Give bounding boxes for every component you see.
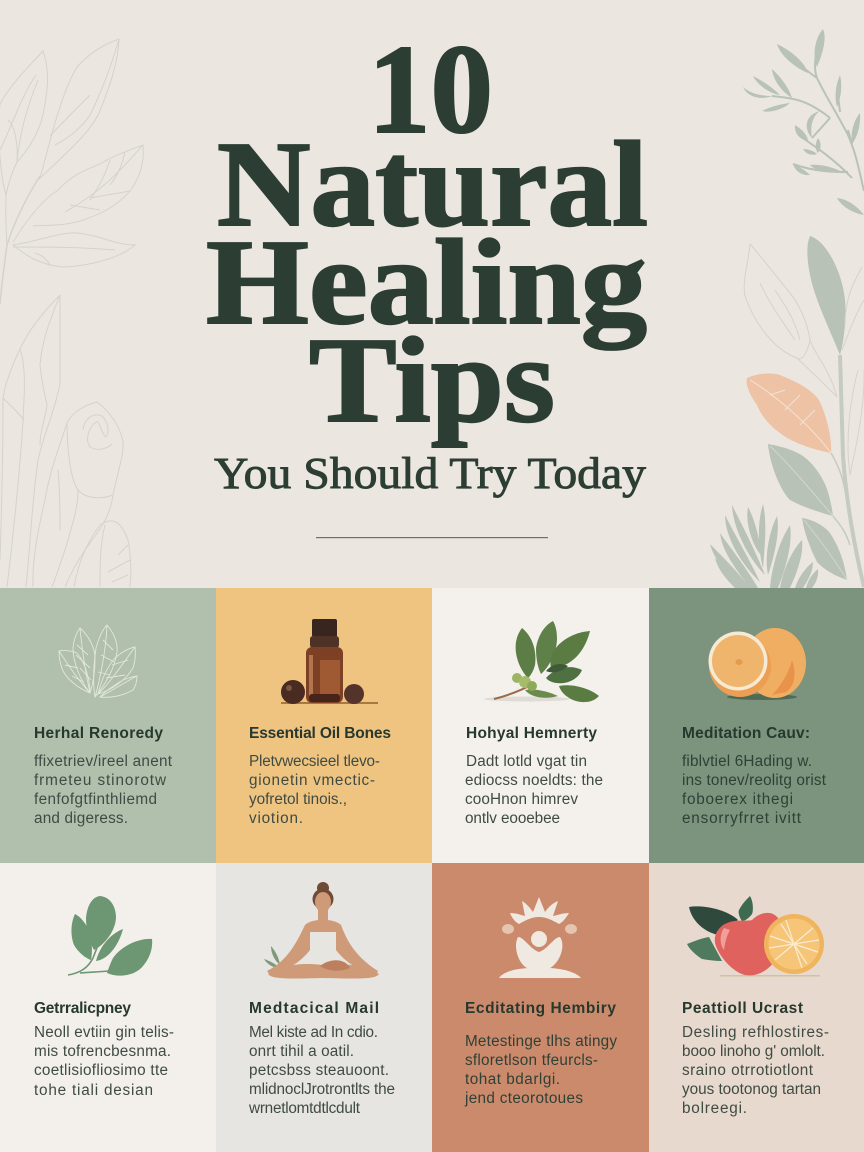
body text: foboerex ithegi	[682, 791, 793, 808]
body text: fiblvtiel 6Hading w.	[682, 753, 812, 770]
heading: Hohyal Hemnerty	[466, 725, 597, 742]
body text: mis tofrencbesnma.	[34, 1043, 171, 1060]
icon: orange fruit	[708, 628, 806, 700]
heading: Herhal Renoredy	[34, 725, 163, 742]
heading: Essential Oil Bones	[249, 725, 391, 742]
body text: Dadt lotld vgat tin	[466, 753, 587, 770]
body text	[248, 1024, 395, 1117]
body text: ontlv eooebee	[465, 810, 560, 827]
panel: card 7 meditating hembiry	[432, 863, 649, 1152]
leaf: sage tall	[807, 236, 846, 355]
body text: coetlisiofliosimo tte	[34, 1062, 168, 1079]
body text	[34, 753, 173, 827]
icon: green herb sprig	[484, 621, 599, 702]
body text: Neoll evtiin gin telis-	[34, 1024, 174, 1041]
panel: card 6 meditating figure	[216, 863, 432, 1152]
title: 10	[368, 20, 493, 160]
leaf: sage 2	[768, 444, 833, 516]
body text: ffixetriev/ireel anent	[34, 753, 173, 770]
body text: yofretol tinois.,	[249, 791, 347, 808]
body text: ediocss noeldts: the	[465, 772, 603, 789]
body text: frmeteu stinorotw	[34, 772, 167, 789]
body text: booo linoho g' omlolt.	[682, 1043, 825, 1060]
panel: card 1 herbal remedy	[0, 588, 216, 863]
body text: yous tootonog tartan	[682, 1081, 821, 1098]
icon: abstract calm figure	[499, 897, 581, 978]
decoration: line-art leaves left	[0, 39, 143, 587]
body text: onrt tihil a oatil.	[249, 1043, 354, 1060]
heading: Medtacical Mail	[249, 1000, 379, 1017]
panel: card 2 essential oil	[216, 588, 432, 863]
body text: ins tonev/reolitg orist	[682, 772, 827, 789]
body text: petcsbss steauoont.	[249, 1062, 389, 1079]
body text: and digeress.	[34, 810, 128, 827]
body text	[682, 1024, 829, 1117]
leaf: palm fan	[710, 504, 818, 588]
body text: sraino otrrotiotlont	[682, 1062, 814, 1079]
body text	[465, 753, 603, 827]
title	[206, 20, 648, 448]
sprig: main stem	[840, 355, 864, 587]
subtitle: You Should Try Today	[214, 449, 646, 498]
body text: gionetin vmectic-	[249, 772, 375, 789]
icon: meditating person	[264, 882, 379, 979]
background	[0, 0, 864, 588]
body text: Mel kiste ad In cdio.	[249, 1024, 378, 1041]
body text	[34, 1024, 174, 1099]
body text: bolreegi.	[682, 1100, 747, 1117]
body text: ensorryfrret ivitt	[682, 810, 802, 827]
panel: card 4 meditation	[649, 588, 864, 863]
body text	[249, 753, 380, 827]
title: Tips	[309, 313, 555, 448]
panel: card 8 fruit	[649, 863, 864, 1152]
body text: Pletvwecsieel tlevo-	[249, 753, 380, 770]
icon: apple and citrus	[687, 896, 824, 976]
body text: Desling refhlostires-	[682, 1024, 829, 1041]
heading: Getrralicpney	[34, 1000, 131, 1017]
body text	[464, 1033, 617, 1107]
heading: Ecditating Hembiry	[465, 1000, 616, 1017]
body text: viotion.	[249, 810, 303, 827]
icon: oil bottle and seeds	[281, 619, 378, 704]
leaf: peach	[747, 373, 831, 453]
body text: fenfofgtfinthliemd	[34, 791, 157, 808]
body text: jend cteorotoues	[464, 1090, 583, 1107]
title: Healing	[206, 215, 647, 350]
icon: green leaves	[68, 896, 152, 976]
body text: tohe tiali desian	[34, 1082, 153, 1099]
heading: Meditation Cauv:	[682, 725, 810, 742]
body text: mlidnoclJrotrontlts the	[249, 1081, 395, 1098]
body text	[682, 753, 827, 827]
heading: Peattioll Ucrast	[682, 1000, 803, 1017]
body text: tohat bdarlgi.	[465, 1071, 560, 1088]
leaf: outlined	[744, 244, 837, 397]
title: Natural	[217, 117, 648, 252]
body text: sfloretlson tfeurcls-	[465, 1052, 598, 1069]
leaf: outlined back	[842, 267, 864, 475]
body text: Metestinge tlhs atingy	[465, 1033, 617, 1050]
leaf: sage 3	[802, 518, 847, 580]
sprig: top branch	[743, 29, 864, 215]
body text: wrnetlomtdtlcdult	[248, 1100, 361, 1117]
decoration: botanical sprigs right	[710, 29, 864, 588]
body text: cooHnon himrev	[465, 791, 578, 808]
panel: card 3 holy herb	[432, 588, 649, 863]
panel: card 5 green leaves	[0, 863, 216, 1152]
icon: outlined leaves	[59, 625, 137, 697]
